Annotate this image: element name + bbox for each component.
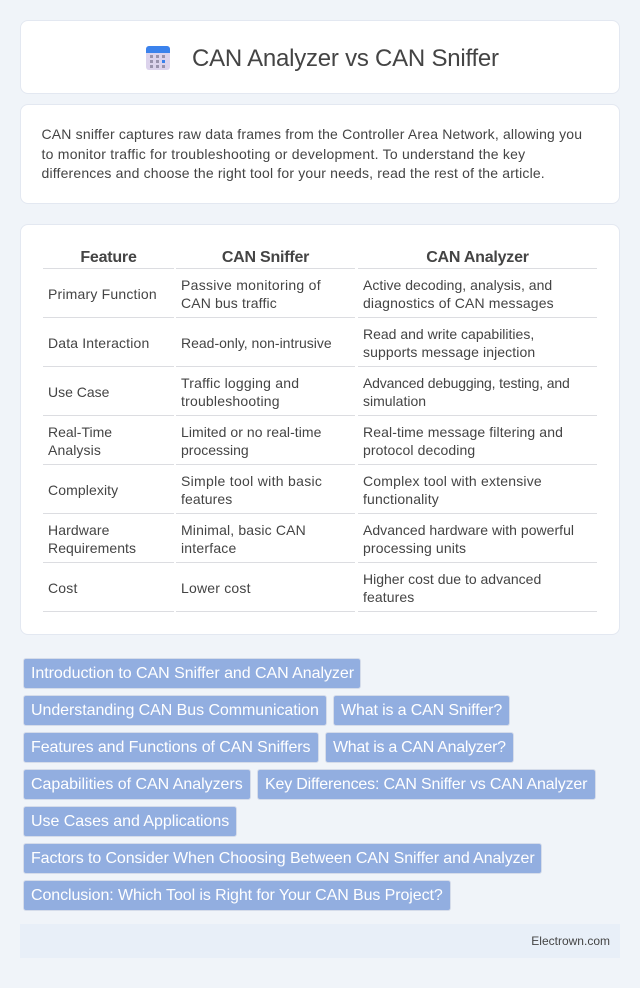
intro panel	[20, 104, 620, 204]
tag: Factors to Consider When Choosing Between CAN Sniffer and Analyzer	[31, 850, 535, 867]
row: real-time analysis: Real-Time	[48, 424, 112, 440]
header panel	[20, 20, 620, 94]
row: data interaction: supports message injection	[363, 344, 535, 360]
row: primary function: Active decoding, analysis, and	[363, 277, 552, 293]
row: primary function	[48, 277, 554, 311]
row: primary function: diagnostics of CAN messages	[363, 295, 554, 311]
row: data interaction: Read and write capabilities,	[363, 326, 534, 342]
row: hardware requirements: Requirements	[48, 540, 136, 556]
tag	[23, 880, 451, 911]
tag	[23, 695, 327, 726]
row: use case	[48, 375, 570, 409]
row: real-time analysis: Analysis	[48, 442, 101, 458]
row: real-time analysis: Limited or no real-time	[181, 424, 321, 440]
intro text: differences and choose the right tool for your needs, read the rest of the article.	[42, 165, 545, 181]
tag: Capabilities of CAN Analyzers	[31, 776, 243, 793]
row: use case: Use Case	[48, 384, 109, 400]
row: primary function: Passive monitoring of	[181, 277, 321, 293]
table header row: CAN Analyzer	[426, 249, 529, 266]
intro text	[42, 126, 582, 181]
row: hardware requirements: Hardware	[48, 522, 110, 538]
row: use case: simulation	[363, 393, 426, 409]
tag	[23, 769, 251, 800]
row: cost: Higher cost due to advanced	[363, 571, 541, 587]
tag: Key Differences: CAN Sniffer vs CAN Analyzer	[265, 776, 587, 793]
intro text: to monitor traffic for troubleshooting or development. To understand the key	[42, 146, 525, 162]
row: complexity: Complex tool with extensive	[363, 473, 542, 489]
row: hardware requirements: Advanced hardware with powerful	[363, 522, 574, 538]
row: primary function: CAN bus traffic	[181, 295, 277, 311]
table header row: Feature	[80, 249, 137, 266]
row: hardware requirements	[48, 522, 574, 556]
row: complexity: features	[181, 491, 232, 507]
row: complexity: Simple tool with basic	[181, 473, 322, 489]
footer	[20, 924, 620, 958]
row: primary function: Primary Function	[48, 286, 157, 302]
row: use case: troubleshooting	[181, 393, 280, 409]
tag: Understanding CAN Bus Communication	[31, 702, 319, 719]
tag	[257, 769, 596, 800]
row: real-time analysis: processing	[181, 442, 249, 458]
row: complexity: functionality	[363, 491, 439, 507]
row: complexity: Complexity	[48, 482, 118, 498]
row: cost: Lower cost	[181, 580, 251, 596]
row: hardware requirements: interface	[181, 540, 236, 556]
row: cost: features	[363, 589, 414, 605]
row: data interaction: Read-only, non-intrusive	[181, 335, 332, 351]
tag: What is a CAN Sniffer?	[341, 702, 502, 719]
tag	[325, 732, 514, 763]
row: data interaction: Data Interaction	[48, 335, 149, 351]
tag	[23, 806, 237, 837]
icon: calendar	[146, 46, 170, 70]
tag: Conclusion: Which Tool is Right for Your CAN Bus Project?	[31, 887, 443, 904]
row: use case: Advanced debugging, testing, and	[363, 375, 570, 391]
comparison table panel	[20, 224, 620, 635]
title: CAN Analyzer vs CAN Sniffer	[192, 45, 499, 72]
row: cost	[48, 571, 541, 605]
table header row: CAN Sniffer	[222, 249, 309, 266]
tag	[23, 732, 319, 763]
row: complexity	[48, 473, 542, 507]
row: real-time analysis	[48, 424, 563, 458]
tag: Introduction to CAN Sniffer and CAN Analyzer	[31, 665, 354, 682]
row: use case: Traffic logging and	[181, 375, 299, 391]
row: data interaction	[48, 326, 535, 360]
table header row	[80, 249, 529, 266]
intro text: CAN sniffer captures raw data frames from the Controller Area Network, allowing you	[42, 126, 582, 142]
tag: What is a CAN Analyzer?	[333, 739, 506, 756]
tag: Features and Functions of CAN Sniffers	[31, 739, 310, 756]
row: real-time analysis: protocol decoding	[363, 442, 475, 458]
row: real-time analysis: Real-time message filtering and	[363, 424, 563, 440]
row: cost: Cost	[48, 580, 78, 596]
tag	[23, 658, 361, 689]
row: hardware requirements: processing units	[363, 540, 466, 556]
row: hardware requirements: Minimal, basic CAN	[181, 522, 306, 538]
tag: Use Cases and Applications	[31, 813, 229, 830]
tag	[333, 695, 510, 726]
topic tags	[23, 658, 596, 911]
footer credit: Electrown.com	[531, 934, 610, 948]
tag	[23, 843, 542, 874]
